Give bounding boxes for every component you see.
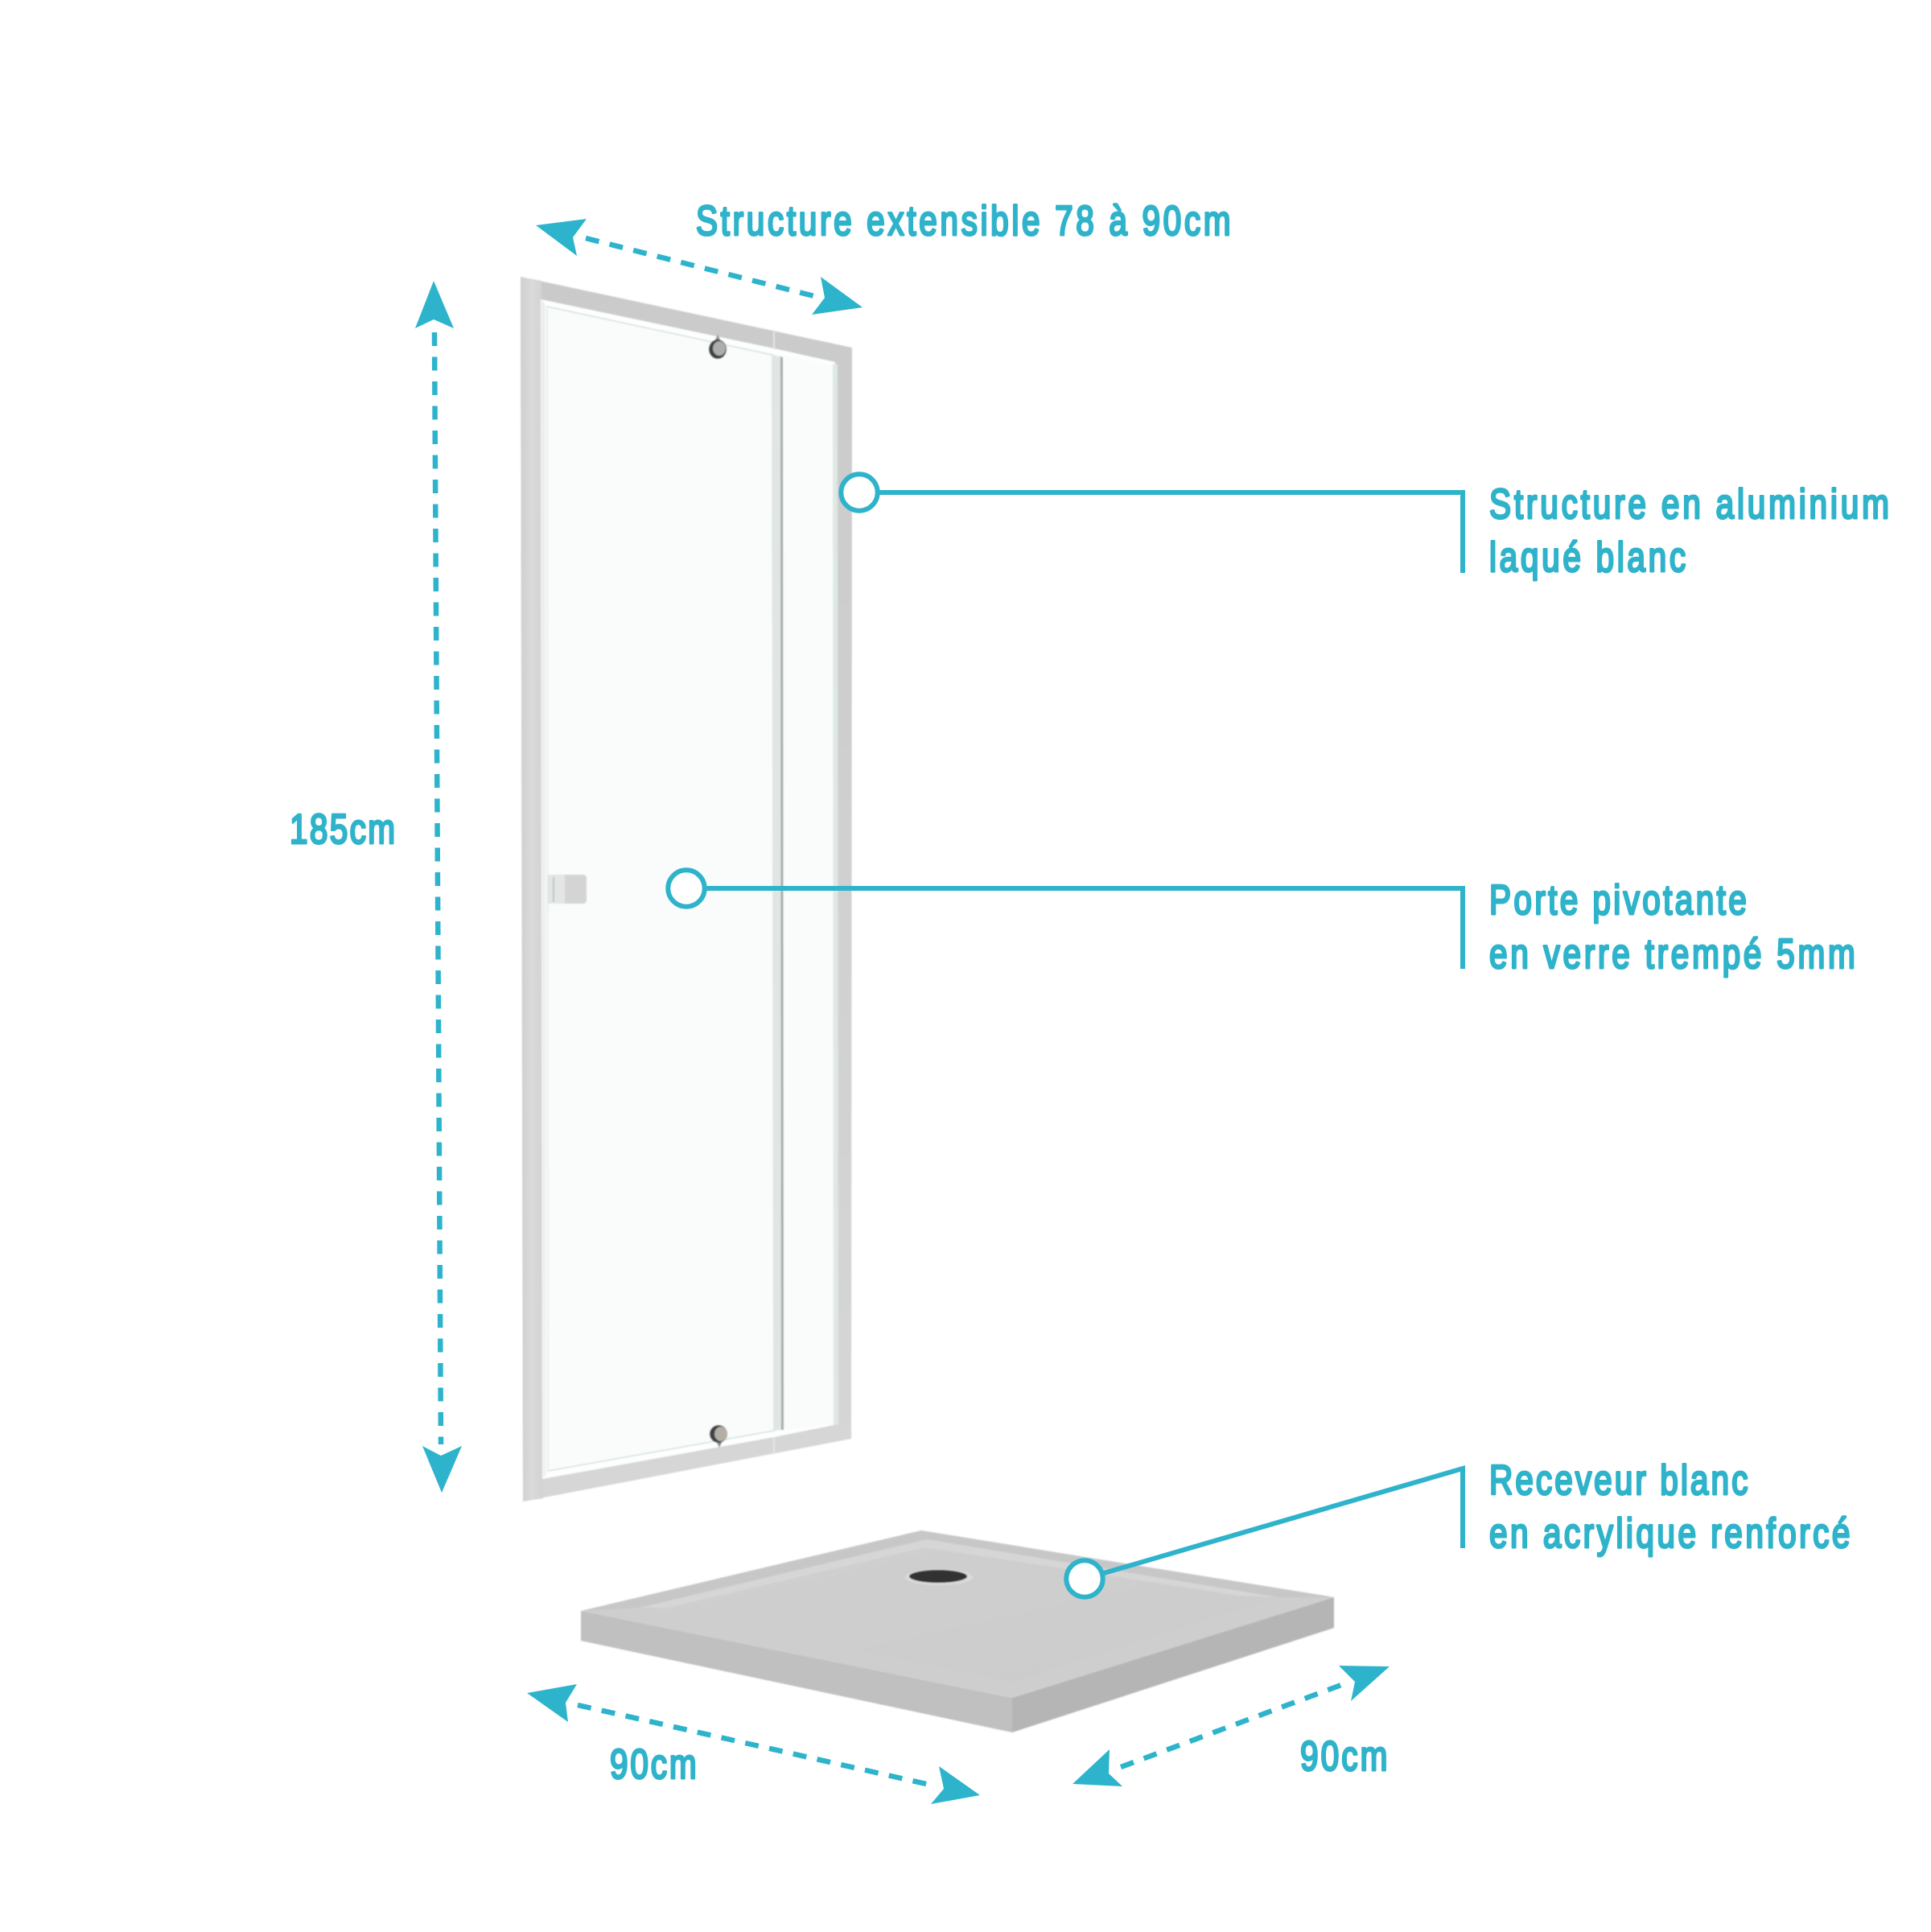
left glass edge	[541, 300, 548, 1478]
handle	[547, 875, 587, 904]
text: aluminium structure: Structure en aluminium	[1489, 480, 1889, 527]
top hinge	[709, 335, 727, 359]
label: height: 185cm	[290, 805, 395, 852]
callout: aluminium structure	[841, 474, 1463, 573]
callout: tray	[1066, 1469, 1463, 1597]
arrow: tray depth left	[527, 1684, 980, 1804]
arrow: tray width right	[1073, 1666, 1390, 1786]
text: aluminium structure	[1489, 480, 1889, 580]
label: tray width: 90cm	[1300, 1732, 1387, 1779]
drain	[905, 1569, 973, 1585]
arrow: height	[415, 281, 462, 1493]
label: tray depth: 90cm	[610, 1740, 697, 1787]
fixed glass panel	[783, 355, 835, 1431]
shower tray	[581, 1530, 1334, 1732]
text: glass door	[1489, 876, 1855, 977]
bottom frame joint	[773, 1437, 775, 1454]
arrow: width of structure	[536, 219, 863, 315]
shower door frame	[521, 277, 852, 1502]
text: tray: en acrylique renforcé	[1489, 1510, 1850, 1556]
door glass panel	[547, 307, 774, 1471]
right glass strip	[833, 364, 838, 1425]
vertical profile	[772, 355, 784, 1431]
text: tray: Receveur blanc	[1489, 1456, 1748, 1503]
text: glass door: Porte pivotante	[1489, 876, 1747, 923]
label: structure width: Structure extensible 78 à 90cm	[696, 197, 1231, 244]
bottom hinge	[710, 1425, 727, 1448]
text: glass door: en verre trempé 5mm	[1489, 930, 1855, 977]
text: aluminium structure: laqué blanc	[1489, 533, 1686, 580]
callout: glass door	[668, 870, 1463, 969]
top frame joint	[773, 330, 775, 349]
text: tray	[1489, 1456, 1851, 1556]
